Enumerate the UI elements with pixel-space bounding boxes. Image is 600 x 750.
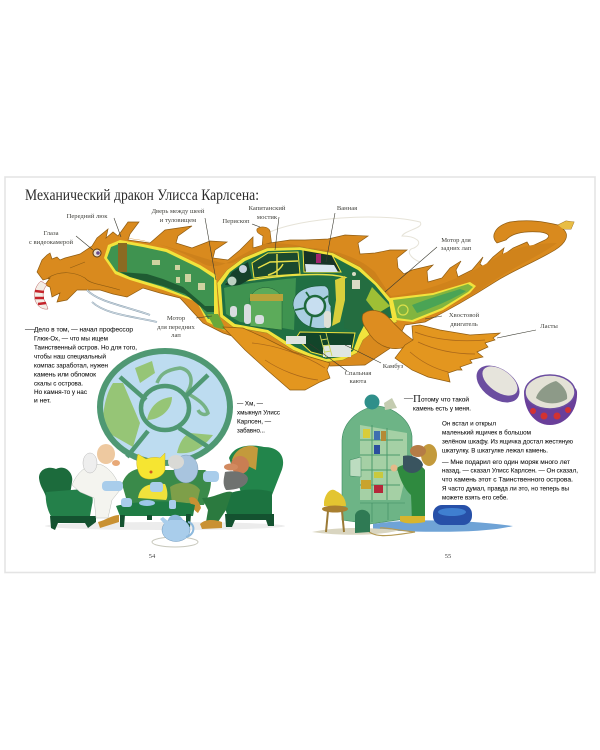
tail tip — [558, 221, 574, 229]
text block: hm — [237, 400, 281, 434]
cabinet shelf lines — [360, 425, 403, 500]
cabinet shelves inner — [360, 425, 407, 500]
cabinet scene — [312, 394, 513, 536]
neck stair floor — [120, 272, 214, 312]
right cabin yellow-green ornament — [366, 287, 390, 314]
professor speech lines: камень или обломок — [34, 370, 96, 378]
green sofa back — [122, 469, 211, 505]
upper-left room with crew — [225, 262, 252, 286]
red tongue stripes — [35, 291, 46, 304]
label: tail engine line two: двигатель — [450, 321, 478, 328]
cat head — [137, 453, 165, 479]
neck portholes — [152, 260, 205, 290]
neck lower engine — [207, 314, 226, 330]
tin red dots — [530, 407, 571, 420]
floor shadow — [45, 522, 285, 530]
cabinet open door — [350, 457, 361, 477]
lid rim — [470, 358, 526, 410]
blue cup left — [121, 498, 132, 507]
label: sleeping cabin: Спальная — [345, 370, 371, 377]
back ridge shading — [120, 238, 392, 298]
round window — [100, 351, 230, 463]
text block: narrative: назад, — сказал Улисс Карлсен. — Он сказал, — [442, 468, 578, 474]
dragon periscope — [257, 227, 272, 247]
rope — [366, 528, 415, 536]
right chair back — [229, 446, 283, 495]
tail engine coils — [398, 305, 408, 315]
professor speech lines: скалы с острова. — [34, 380, 83, 388]
slippers — [400, 516, 425, 523]
label: bath: Ванная — [337, 205, 357, 212]
dragon illustration — [34, 221, 574, 390]
captain face — [231, 456, 249, 474]
eye — [93, 249, 101, 257]
golden stool — [322, 490, 348, 532]
blue cup right — [169, 500, 176, 509]
professor speech lines: и нет. — [34, 398, 51, 404]
text block: hm: — Хм, — — [237, 400, 263, 408]
bathtub — [305, 264, 338, 272]
mouth and tongue — [34, 281, 48, 309]
ladder — [320, 333, 332, 358]
tail compartment interior — [393, 284, 473, 320]
bath room — [303, 250, 341, 272]
label: bridge line two: мостик — [257, 214, 278, 221]
dragon body silhouette — [37, 221, 574, 366]
right chair seat — [222, 489, 272, 518]
captain nose — [224, 464, 238, 470]
neck compartment green — [107, 243, 214, 319]
green islands — [103, 361, 213, 453]
label: front motor line three: лап — [171, 332, 181, 339]
stool top — [322, 506, 348, 512]
leader lines — [76, 213, 536, 371]
right cabin yellow deck — [332, 276, 345, 326]
tail compartment frame — [390, 282, 476, 322]
text block: narrative: — Мне подарил его один моряк много лет — [442, 459, 570, 466]
label: bridge: Капитанский — [249, 205, 286, 212]
professor speech lines: Таинственный остров. Но для того, — [34, 344, 137, 352]
hind flipper ribs — [410, 332, 485, 372]
tea table — [102, 481, 195, 527]
professor speech lines: Дело в том, — начал профессор — [34, 326, 133, 334]
bridge equipment — [258, 254, 298, 275]
blue rug — [373, 520, 513, 532]
text block: professor — [24, 324, 137, 404]
text block: narrative — [442, 420, 578, 502]
mouse sweater — [170, 483, 200, 503]
teapot spout — [160, 517, 169, 526]
cabinet body — [342, 406, 412, 524]
pink curtain — [316, 254, 321, 263]
sea dragon swirl — [157, 368, 208, 414]
professor hair — [83, 453, 97, 473]
professor nose — [112, 460, 120, 466]
label: front motor line two: для передних — [157, 324, 196, 331]
floor shadow — [312, 528, 400, 535]
window frame — [100, 351, 230, 463]
eye pupil — [96, 251, 100, 255]
title: Механический дракон Улисса Карлсена: — [25, 187, 259, 204]
professor speech lines — [34, 326, 137, 404]
label: galley: Камбуз — [383, 363, 404, 370]
tail scales shading — [390, 243, 557, 320]
face — [410, 445, 426, 457]
teapot body — [162, 518, 190, 542]
hind leg — [362, 310, 413, 349]
mouse cup — [203, 471, 219, 482]
label: eyes: Глаза — [43, 230, 59, 237]
tin wall — [524, 382, 577, 425]
sleeping cabin bed — [286, 336, 306, 344]
captain beard — [224, 471, 248, 490]
mouse head — [174, 455, 198, 483]
label: sleeping cabin line two: каюта — [350, 378, 366, 385]
lid inner — [477, 361, 523, 401]
machine yellow panel — [250, 294, 283, 301]
forward hatch ladder — [118, 243, 127, 272]
captain at cabinet — [390, 444, 437, 523]
bottom rooms — [296, 332, 355, 356]
front leg — [223, 327, 330, 390]
trinkets on stool — [324, 490, 346, 506]
text block: narrative: можете взять его себе. — [442, 494, 508, 502]
professor — [72, 444, 120, 528]
captain — [189, 446, 258, 529]
green cabinet — [342, 394, 412, 524]
page number left: 54 — [149, 553, 156, 560]
page border — [5, 177, 595, 572]
because lines: камень есть у меня. — [413, 406, 471, 412]
green bag — [355, 510, 370, 533]
crew figures — [230, 304, 264, 324]
label: flippers: Ласты — [540, 323, 558, 330]
hat — [421, 444, 437, 466]
captain other shoe — [189, 497, 201, 513]
blue pillow — [433, 505, 472, 525]
faint ghost outline behind the dragon — [270, 217, 421, 262]
main cabin yellow frame — [217, 247, 397, 362]
captain's bridge room — [252, 252, 300, 278]
cat cup — [150, 482, 163, 492]
trinket on cabinet — [384, 398, 397, 410]
machine tower — [250, 288, 282, 330]
window spokes — [120, 375, 210, 457]
engine room spokes — [295, 292, 328, 328]
pyjamas — [397, 464, 425, 518]
label: door line two: и туловищем — [160, 217, 197, 224]
dragon labels with leader lines — [29, 205, 558, 385]
professor speech dash and drop cap: — — [24, 324, 36, 335]
text block: narrative: маленький ящичек в большом — [442, 428, 531, 436]
cat body — [138, 484, 167, 500]
text block: narrative: Он встал и открыл — [442, 420, 496, 428]
because drop cap: П — [413, 393, 421, 405]
text block: narrative: Я часто думал, правда ли это, но теперь вы — [442, 486, 569, 492]
astronaut crew figure — [324, 311, 331, 328]
label: door: Дверь между шеей — [152, 208, 205, 215]
front flipper ribs — [252, 343, 325, 380]
cabinet bottom doors — [360, 503, 405, 522]
text block: narrative: что камень этот с Таинственного острова. — [442, 476, 573, 484]
page number right: 55 — [445, 553, 451, 560]
window glass — [100, 351, 230, 463]
engine room centre wheel — [305, 296, 325, 316]
text block: hm: забавно... — [237, 426, 265, 434]
cabin interior — [221, 250, 392, 359]
open tin lid — [470, 358, 526, 410]
text block: narrative: шкатулку. В шкатулке лежал камень. — [442, 448, 548, 454]
mouse — [168, 455, 219, 503]
open tin with stone — [524, 375, 577, 425]
stone — [536, 381, 567, 403]
teapot handle — [186, 522, 193, 537]
central machine room — [224, 278, 296, 330]
window centre ring — [141, 386, 189, 430]
label: rear motor line two: задних лап — [441, 245, 472, 252]
mouse ear — [168, 455, 184, 469]
captain hat — [232, 446, 258, 470]
machine porthole — [228, 276, 236, 286]
ball on cabinet — [364, 394, 380, 410]
left chair legs — [50, 516, 96, 530]
hand — [390, 464, 398, 472]
tin opening — [525, 375, 575, 409]
table legs — [120, 514, 191, 527]
right armchair — [222, 446, 283, 527]
whisker tubes — [87, 290, 157, 322]
blue engine room — [293, 286, 331, 328]
label: front motor: Мотор — [167, 315, 186, 322]
stool legs — [326, 511, 344, 532]
left chair seat — [46, 489, 93, 518]
professor coat — [72, 464, 120, 518]
because lines: отому что такой — [421, 396, 469, 404]
pillow highlight — [438, 508, 466, 516]
right cabin rooms — [344, 272, 388, 332]
because lines — [413, 396, 471, 412]
tail engine tube — [412, 289, 466, 313]
beard — [403, 455, 423, 473]
label: periscope: Перископ — [222, 218, 250, 225]
saucer — [152, 537, 198, 547]
text block: hm: хмыкнул Улисс — [237, 410, 281, 416]
professor speech lines: чтобы наш специальный — [34, 352, 106, 360]
captain shoe — [200, 520, 222, 529]
label: front hatch: Передний люк — [67, 213, 108, 220]
left chair back — [39, 468, 72, 497]
text block: hm: Карлсен, — — [237, 418, 271, 426]
professor speech lines: Но камня-то у нас — [34, 389, 88, 396]
cat nose — [150, 470, 152, 474]
jaw lines — [48, 262, 120, 290]
professor speech lines: компас заработал, нужен — [34, 362, 108, 370]
text block: narrative: зелёном шкафу. Из ящичка достал жестяную — [442, 438, 573, 446]
crew member — [239, 265, 247, 273]
tea party scene — [39, 444, 285, 547]
hind flipper — [395, 325, 500, 382]
label: tail engine: Хвостовой — [449, 312, 480, 319]
cabinet goods — [361, 429, 386, 493]
neck compartment yellow frame — [104, 240, 226, 331]
because dash: — — [403, 393, 414, 403]
label: eyes line two: с видеокамерой — [29, 239, 73, 246]
whisker tube highlights — [87, 290, 157, 322]
captain legs — [202, 492, 232, 522]
right chair legs — [225, 514, 274, 527]
upper rooms floor band — [226, 275, 352, 283]
professor's cup — [102, 481, 123, 491]
professor speech lines: Глюк-Ох, — что мы ищем — [34, 336, 108, 342]
professor shoe — [98, 515, 119, 528]
cat — [137, 453, 167, 500]
right cabin light blocks — [352, 272, 360, 289]
left armchair — [39, 468, 96, 530]
teapot — [160, 515, 193, 542]
galley — [323, 345, 351, 357]
teapot lid — [168, 515, 183, 520]
label: rear motor: Мотор для — [441, 237, 471, 244]
text block: because — [403, 393, 471, 412]
table top — [116, 501, 195, 516]
blue plate — [139, 500, 155, 506]
professor head — [97, 444, 115, 464]
